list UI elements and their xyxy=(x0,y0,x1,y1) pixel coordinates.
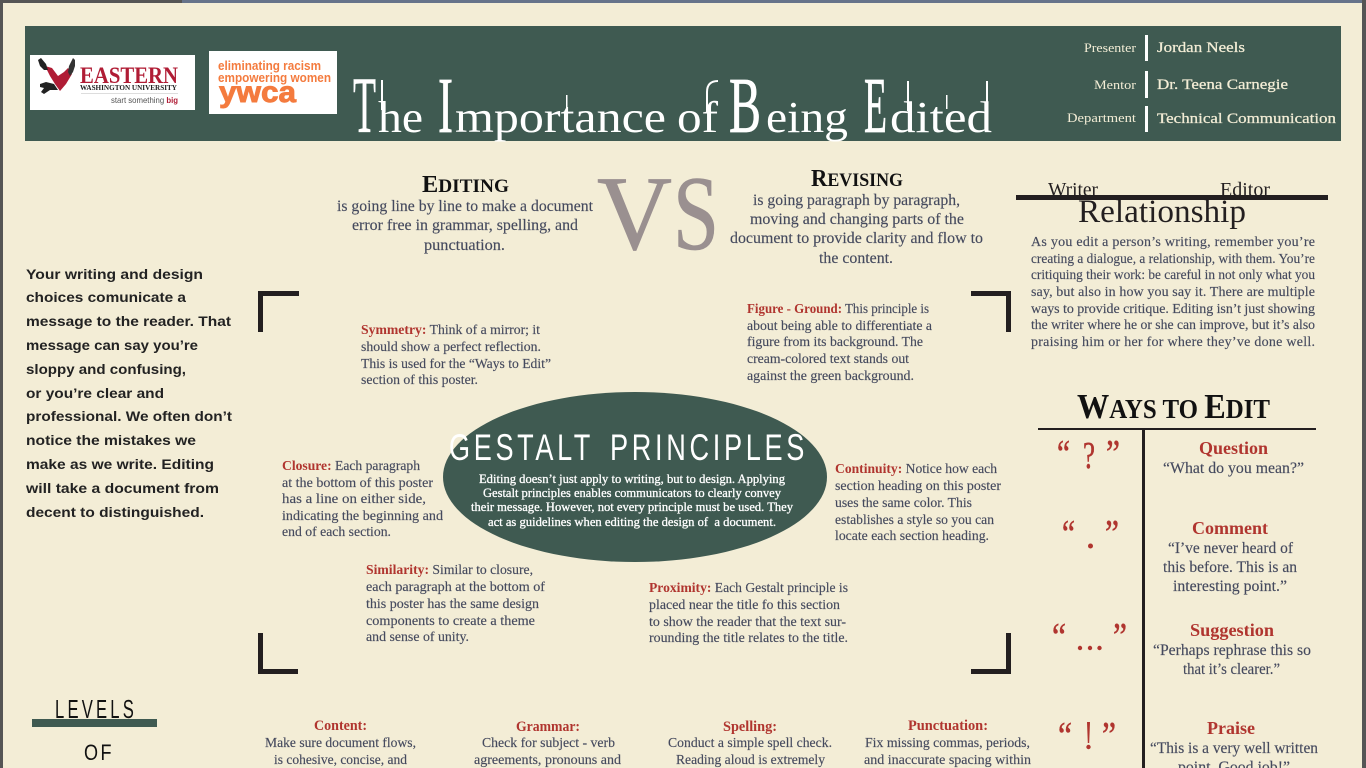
VS: S xyxy=(673,155,719,272)
panel: relationship xyxy=(1016,179,1328,350)
level: grammar xyxy=(474,719,621,768)
title: he xyxy=(378,93,423,142)
icon: question mark in quotes xyxy=(1057,433,1120,477)
heading: gestalt principles: PRINCIPLES xyxy=(610,427,808,468)
level: punctuation: Punctuation: xyxy=(908,718,988,734)
heading: revising: REVISING xyxy=(811,166,903,192)
principle: symmetry: This is used for the “Ways to Edit” xyxy=(361,357,551,372)
principle: symmetry: Symmetry: Think of a mirror; it xyxy=(361,323,540,338)
principle: closure: at the bottom of this poster xyxy=(282,476,433,491)
icon: ellipsis in quotes: “ xyxy=(1052,616,1066,658)
text block: writing and design choices: decent to distinguished. xyxy=(26,504,204,520)
relationship paragraph: say, but also in how you say it. There are multiple xyxy=(1031,285,1315,300)
level: spelling xyxy=(668,719,832,768)
logo: Eastern Washington University xyxy=(30,55,195,110)
way: suggestion: Suggestion xyxy=(1190,620,1274,640)
writer label: Writer xyxy=(1048,179,1098,201)
heading: gestalt principles: GESTALT xyxy=(449,427,594,468)
level: content: Make sure document flows, xyxy=(265,736,416,751)
principle: similarity: this poster has the same design xyxy=(366,597,539,612)
principle: closure xyxy=(282,459,443,540)
principle: closure: indicating the beginning and xyxy=(282,509,443,524)
text block: writing and design choices: professional. We often don’t xyxy=(26,408,232,424)
principle: similarity: Similarity: Similar to closure, xyxy=(366,563,533,578)
level: spelling: Spelling: xyxy=(723,719,777,735)
credits: Presenter xyxy=(1084,40,1137,55)
way: comment: interesting point.” xyxy=(1173,578,1287,595)
principle: similarity: and sense of unity. xyxy=(366,630,469,645)
panel: editing definition: is going line by line to make a document xyxy=(337,198,594,215)
title: mportance xyxy=(455,93,666,142)
panel: revising definition: moving and changing parts of the xyxy=(750,211,964,228)
icon: question mark in quotes: ? xyxy=(1083,435,1095,477)
way: comment: this before. This is an xyxy=(1163,559,1297,576)
level: grammar: agreements, pronouns and xyxy=(474,753,621,768)
level: punctuation: Fix missing commas, periods, xyxy=(865,736,1030,751)
principle: continuity: locate each section heading. xyxy=(835,529,989,544)
bracket: top left xyxy=(260,294,299,332)
way: question xyxy=(1163,438,1304,477)
logo: YWCA: empowering women xyxy=(218,71,331,85)
principle: proximity: rounding the title relates to the title. xyxy=(649,631,848,646)
relationship paragraph: As you edit a person’s writing, remember you’re xyxy=(1031,235,1315,250)
way: praise: Praise xyxy=(1207,718,1255,738)
heading: ways to edit: WAYS TO EDIT xyxy=(1077,387,1270,426)
heading: levels of: OF xyxy=(84,740,114,765)
credits: Jordan Neels xyxy=(1157,40,1245,56)
heading: levels of xyxy=(32,694,157,765)
level: grammar: Grammar: xyxy=(516,719,580,735)
relationship paragraph: the writer where he or she can improve, but it’s also xyxy=(1031,318,1315,333)
principle: continuity: uses the same color. This xyxy=(835,496,972,511)
way: comment xyxy=(1163,518,1297,595)
title: eing xyxy=(766,93,848,142)
text block: writing and design choices: Your writing and design xyxy=(26,266,203,282)
way: suggestion: that it’s clearer.” xyxy=(1183,661,1280,678)
way: question: Question xyxy=(1199,438,1268,458)
principle: symmetry: section of this poster. xyxy=(361,373,478,388)
panel: levels of edit xyxy=(32,694,1031,768)
text block: writing and design choices: or you’re clear and xyxy=(26,385,164,401)
way: comment: Comment xyxy=(1192,518,1268,538)
title: B xyxy=(729,63,761,150)
principle: proximity: to show the reader that the text sur- xyxy=(649,615,846,630)
principle: closure: has a line on either side, xyxy=(282,492,426,507)
principle: continuity: establishes a style so you can xyxy=(835,513,994,528)
principle: figure-ground: about being able to differentiate a xyxy=(747,319,933,334)
credits: Department xyxy=(1067,110,1136,125)
principle: continuity: Continuity: Notice how each xyxy=(835,462,997,477)
panel: editing definition: punctuation. xyxy=(424,237,505,254)
text block: writing and design choices: message to the reader. That xyxy=(26,313,231,329)
VS: V xyxy=(597,155,672,272)
icon: exclamation in quotes: “ xyxy=(1058,715,1072,757)
principle: closure: Closure: Each paragraph xyxy=(282,459,420,474)
icon: period in quotes: ” xyxy=(1105,513,1119,555)
level: punctuation xyxy=(864,718,1031,768)
logo: YWCA: eliminating racism xyxy=(218,59,321,73)
heading: editing: EDITING xyxy=(422,172,509,198)
relationship paragraph: critiquing their work: be careful in not only what you xyxy=(1031,268,1315,283)
way: praise xyxy=(1150,718,1318,768)
credits: Technical Communication xyxy=(1157,111,1337,127)
principle: figure-ground: figure from its background. The xyxy=(747,335,923,350)
principle: figure-ground: Figure - Ground: This principle is xyxy=(747,302,929,317)
logo: YWCA xyxy=(209,51,337,114)
level: punctuation: and inaccurate spacing within xyxy=(864,753,1031,768)
principle: symmetry xyxy=(361,323,551,388)
principle: figure-ground xyxy=(747,302,933,384)
principle: similarity xyxy=(366,563,545,645)
principle: figure-ground: against the green background. xyxy=(747,369,914,384)
level: content: Content: xyxy=(314,718,367,734)
text block: writing and design choices xyxy=(25,266,232,520)
panel: ways to edit xyxy=(1038,387,1318,768)
logo: Eastern Washington University: WASHINGTON UNIVERSITY xyxy=(80,83,178,92)
central ellipse: act as guidelines when editing the design of a document. xyxy=(488,515,776,529)
logo: Eastern Washington University: EASTERN xyxy=(80,63,178,88)
central ellipse: Gestalt principles enables communicators to clearly convey xyxy=(483,486,782,500)
level: content xyxy=(265,718,416,768)
principle: figure-ground: cream-colored text stands out xyxy=(747,352,909,367)
bracket: top right xyxy=(971,294,1008,332)
title: dited xyxy=(890,93,992,142)
level: spelling: Reading aloud is extremely xyxy=(676,753,825,768)
text block: writing and design choices: message can say you’re xyxy=(26,337,198,353)
principle: continuity xyxy=(835,462,1001,544)
level: content: is cohesive, concise, and xyxy=(274,753,407,768)
text block: writing and design choices: choices comunicate a xyxy=(26,289,186,305)
panel: revising definition xyxy=(730,166,983,267)
principle: proximity: Proximity: Each Gestalt principle is xyxy=(649,581,848,596)
way: suggestion xyxy=(1153,620,1311,678)
credits: Dr. Teena Carnegie xyxy=(1157,77,1288,93)
principle: symmetry: should show a perfect reflection. xyxy=(361,340,541,355)
panel: revising definition: is going paragraph by paragraph, xyxy=(753,192,960,209)
relationship paragraph: praising him or her for where they’ve done well. xyxy=(1031,335,1315,350)
icon: exclamation in quotes: ” xyxy=(1102,715,1116,757)
way: comment: “I’ve never heard of xyxy=(1168,540,1294,557)
relationship paragraph: ways to provide critique. Editing isn’t just showing xyxy=(1031,302,1315,317)
credits xyxy=(1067,35,1337,132)
way: suggestion: “Perhaps rephrase this so xyxy=(1153,642,1311,659)
icon: question mark in quotes: “ xyxy=(1057,433,1070,475)
relationship paragraph: creating a dialogue, a relationship, with them. You’re xyxy=(1031,252,1315,267)
logo: YWCA: ywca xyxy=(219,76,296,109)
level: grammar: Check for subject - verb xyxy=(482,736,615,751)
credits: Mentor xyxy=(1094,77,1137,92)
relationship paragraph xyxy=(1031,235,1315,350)
text block: writing and design choices: will take a document from xyxy=(25,480,219,496)
title: E xyxy=(864,63,887,150)
principle: similarity: components to create a theme xyxy=(366,614,535,629)
title: T xyxy=(353,63,376,150)
level: spelling: Conduct a simple spell check. xyxy=(668,736,832,751)
central ellipse xyxy=(443,392,827,562)
icon: question mark in quotes: ” xyxy=(1106,433,1120,475)
way: question: “What do you mean?” xyxy=(1163,460,1304,477)
text block: writing and design choices: sloppy and confusing, xyxy=(26,361,186,377)
icon: exclamation in quotes xyxy=(1058,715,1116,757)
panel: revising definition: the content. xyxy=(819,250,893,267)
panel: revising definition: document to provide clarity and flow to xyxy=(730,230,983,247)
icon: period in quotes: “ xyxy=(1062,513,1075,555)
bracket: bottom right xyxy=(971,633,1008,672)
panel: editing definition xyxy=(337,172,594,254)
central ellipse: Editing doesn’t just apply to writing, but to design. Applying xyxy=(479,472,786,486)
header banner xyxy=(25,26,1341,150)
principle: closure: end of each section. xyxy=(282,525,391,540)
logo: Eastern Washington University: start something big xyxy=(111,95,178,105)
text block: writing and design choices: notice the mistakes we xyxy=(26,432,196,448)
principle: continuity: section heading on this poster xyxy=(835,479,1001,494)
bracket: bottom left xyxy=(260,633,298,672)
panel: gestalt principles xyxy=(260,294,1008,672)
editor label: Editor xyxy=(1220,179,1270,201)
heading: relationship: Relationship xyxy=(1078,194,1246,230)
principle: proximity: placed near the title fo this section xyxy=(649,598,840,613)
title: of xyxy=(677,93,718,142)
way: praise: “This is a very well written xyxy=(1150,740,1318,757)
icon: ellipsis in quotes: ” xyxy=(1113,616,1127,658)
title xyxy=(353,63,992,150)
principle: similarity: each paragraph at the bottom of xyxy=(366,580,545,595)
heading: levels of: LEVELS xyxy=(55,694,137,724)
central ellipse: their message. However, not every principle must be used. They xyxy=(471,500,794,514)
icon: period in quotes xyxy=(1062,513,1119,555)
panel: editing definition: error free in grammar, spelling, and xyxy=(352,217,578,234)
icon: ellipsis in quotes xyxy=(1052,616,1127,658)
title: I xyxy=(438,63,453,150)
text block: writing and design choices: make as we write. Editing xyxy=(26,456,214,472)
principle: proximity xyxy=(649,581,848,646)
